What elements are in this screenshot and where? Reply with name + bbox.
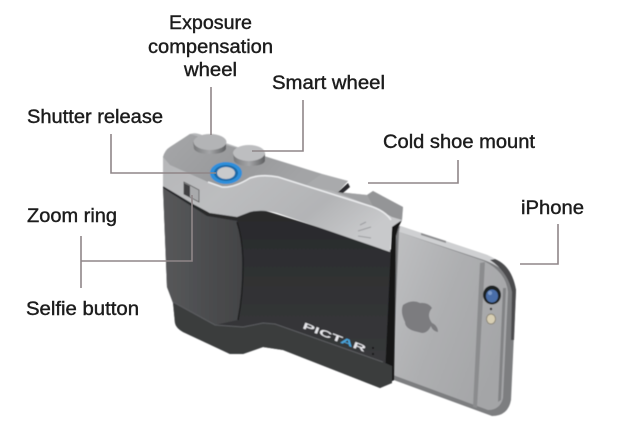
zoom switch bbox=[184, 182, 199, 202]
top plate upper surface bbox=[163, 134, 322, 187]
phone outer edge bbox=[391, 226, 516, 416]
line: zoom ring and selfie button bbox=[81, 195, 192, 288]
PICTAR logo: PICT A R bbox=[301, 321, 368, 354]
phone dark corner edge bbox=[490, 259, 516, 340]
phone back bbox=[393, 232, 508, 410]
line: exposure wheel bbox=[210, 87, 212, 135]
volume button bbox=[421, 233, 446, 243]
grip edge bbox=[237, 222, 243, 320]
phone top highlight bbox=[399, 226, 515, 285]
camera body bbox=[163, 133, 403, 388]
maker mark bbox=[358, 222, 371, 238]
label: selfie button: Selfie button bbox=[26, 299, 139, 320]
leader lines bbox=[81, 87, 558, 288]
line: cold shoe mount bbox=[368, 160, 458, 183]
label: iPhone: iPhone bbox=[521, 198, 584, 219]
smart wheel bbox=[233, 145, 265, 166]
line: smart wheel bbox=[252, 100, 303, 151]
silver top plate bbox=[163, 133, 403, 252]
shoe mount bbox=[305, 174, 348, 192]
phone slot bbox=[380, 220, 402, 388]
line: iPhone bbox=[520, 224, 558, 264]
label: smart wheel: Smart wheel bbox=[272, 73, 385, 94]
apple logo bbox=[402, 301, 438, 333]
label: exposure compensation wheel: wheel bbox=[183, 60, 237, 81]
camera lens bbox=[483, 286, 501, 304]
black body bbox=[163, 186, 392, 388]
line: shutter release bbox=[111, 134, 216, 173]
label: cold shoe mount: Cold shoe mount bbox=[383, 132, 536, 153]
label: exposure compensation wheel: Exposure bbox=[169, 13, 252, 34]
flash bbox=[486, 314, 496, 324]
shutter button bbox=[210, 162, 242, 184]
grip panel bbox=[163, 188, 243, 325]
status dots bbox=[372, 347, 374, 355]
iPhone bbox=[391, 226, 516, 416]
label: zoom ring: Zoom ring bbox=[27, 206, 117, 227]
label: exposure compensation wheel: compensation bbox=[148, 37, 273, 58]
bottom band bbox=[173, 302, 392, 388]
exposure wheel bbox=[193, 134, 226, 154]
microphone bbox=[490, 308, 492, 310]
antenna band bbox=[473, 262, 485, 408]
label: exposure compensation wheel bbox=[148, 13, 273, 81]
shoe gap shadow bbox=[338, 183, 350, 193]
top plate highlight bbox=[208, 176, 391, 220]
label: shutter release: Shutter release bbox=[27, 107, 163, 128]
